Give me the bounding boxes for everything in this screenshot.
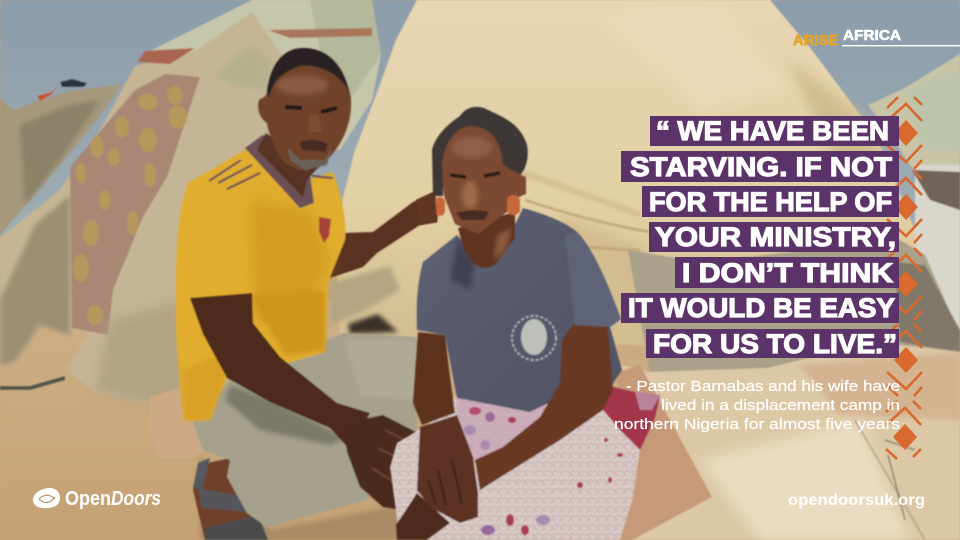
quote text: STARVING. IF NOT (630, 152, 893, 182)
Arise Africa campaign mark (793, 27, 960, 49)
shirt stripes (209, 160, 333, 189)
dark gap under tent (348, 314, 398, 334)
patterned cloth (912, 170, 960, 210)
website URL: opendoorsuk.org (788, 492, 925, 509)
chevron unit 4 (887, 324, 922, 396)
man neck and collar (245, 135, 328, 208)
man head (258, 48, 351, 171)
sky (0, 0, 960, 260)
man hand (343, 415, 418, 510)
top right tent (868, 54, 960, 175)
face details (276, 75, 328, 95)
ground (0, 300, 960, 540)
right panel seam (855, 420, 925, 540)
chevron unit 5 (886, 401, 921, 459)
rope on ground (0, 378, 65, 388)
woman hair braids (432, 107, 528, 196)
brand chevron pattern (886, 97, 922, 459)
man yellow shirt (176, 150, 345, 420)
underline (842, 45, 960, 46)
woman neck (458, 212, 515, 268)
man front arm (190, 293, 370, 450)
word: ARISE: ARISE (793, 32, 838, 49)
pull quote (621, 116, 899, 359)
icon: fish in door blob (33, 488, 60, 508)
photo: man in yellow shirt (176, 48, 438, 540)
khaki tent skirt beneath arm (330, 266, 400, 325)
quote text: “ WE HAVE BEEN (656, 116, 889, 146)
quote text: FOR THE HELP OF (649, 187, 892, 217)
attribution caption: lived in a displacement camp in (661, 398, 900, 414)
shirt logo (512, 316, 556, 360)
woman right arm (475, 315, 613, 490)
chevron unit 3 (887, 248, 922, 320)
chevron unit 2 (887, 171, 922, 243)
mesh tent lit side (105, 32, 282, 402)
red skirt fold (603, 387, 660, 450)
wordmark: Open (65, 488, 111, 510)
attribution caption (614, 379, 900, 433)
mesh tent dark left (0, 195, 70, 365)
quote text (628, 116, 897, 359)
woman earrings (435, 195, 520, 216)
quote text: IT WOULD BE EASY (628, 293, 895, 323)
woman shirt (417, 208, 622, 412)
lower right tent (620, 345, 960, 540)
chevron unit 1 (887, 97, 922, 169)
quote bars (621, 116, 899, 358)
rock (149, 385, 205, 458)
far left tent (0, 84, 123, 235)
man hand on tent (416, 192, 437, 225)
quote text: FOR US TO LIVE.” (653, 329, 897, 359)
photo: woman in grey shirt (390, 107, 660, 540)
sleeve overlay (565, 232, 621, 327)
red tent band (137, 48, 195, 64)
peach panel (618, 365, 712, 540)
shirt badge (319, 217, 331, 243)
tent folds (522, 173, 650, 250)
woman skirt (390, 395, 640, 540)
man trousers (193, 333, 417, 527)
big tent (335, 0, 935, 350)
back tent (150, 0, 381, 150)
gray tarp (628, 240, 960, 372)
pink mesh panel (70, 74, 200, 335)
quote text: I DON’T THINK (682, 258, 894, 288)
mesh tent (0, 12, 282, 405)
man extended arm (330, 192, 438, 278)
man sandal and foot (193, 458, 268, 540)
quote text: YOUR MINISTRY, (655, 222, 896, 252)
Open Doors logo: Doors (111, 488, 161, 510)
word: AFRICA: AFRICA (843, 27, 901, 44)
attribution caption: - Pastor Barnabas and his wife have (626, 379, 900, 395)
ground shadow (200, 455, 400, 540)
woman left arm (413, 332, 455, 425)
right white sheet (915, 165, 960, 335)
woman lower hand (396, 493, 450, 540)
attribution caption: northern Nigeria for almost five years (614, 417, 900, 433)
Open Doors logo (33, 488, 161, 510)
woman upper hand (417, 415, 478, 523)
woman head (442, 126, 526, 234)
